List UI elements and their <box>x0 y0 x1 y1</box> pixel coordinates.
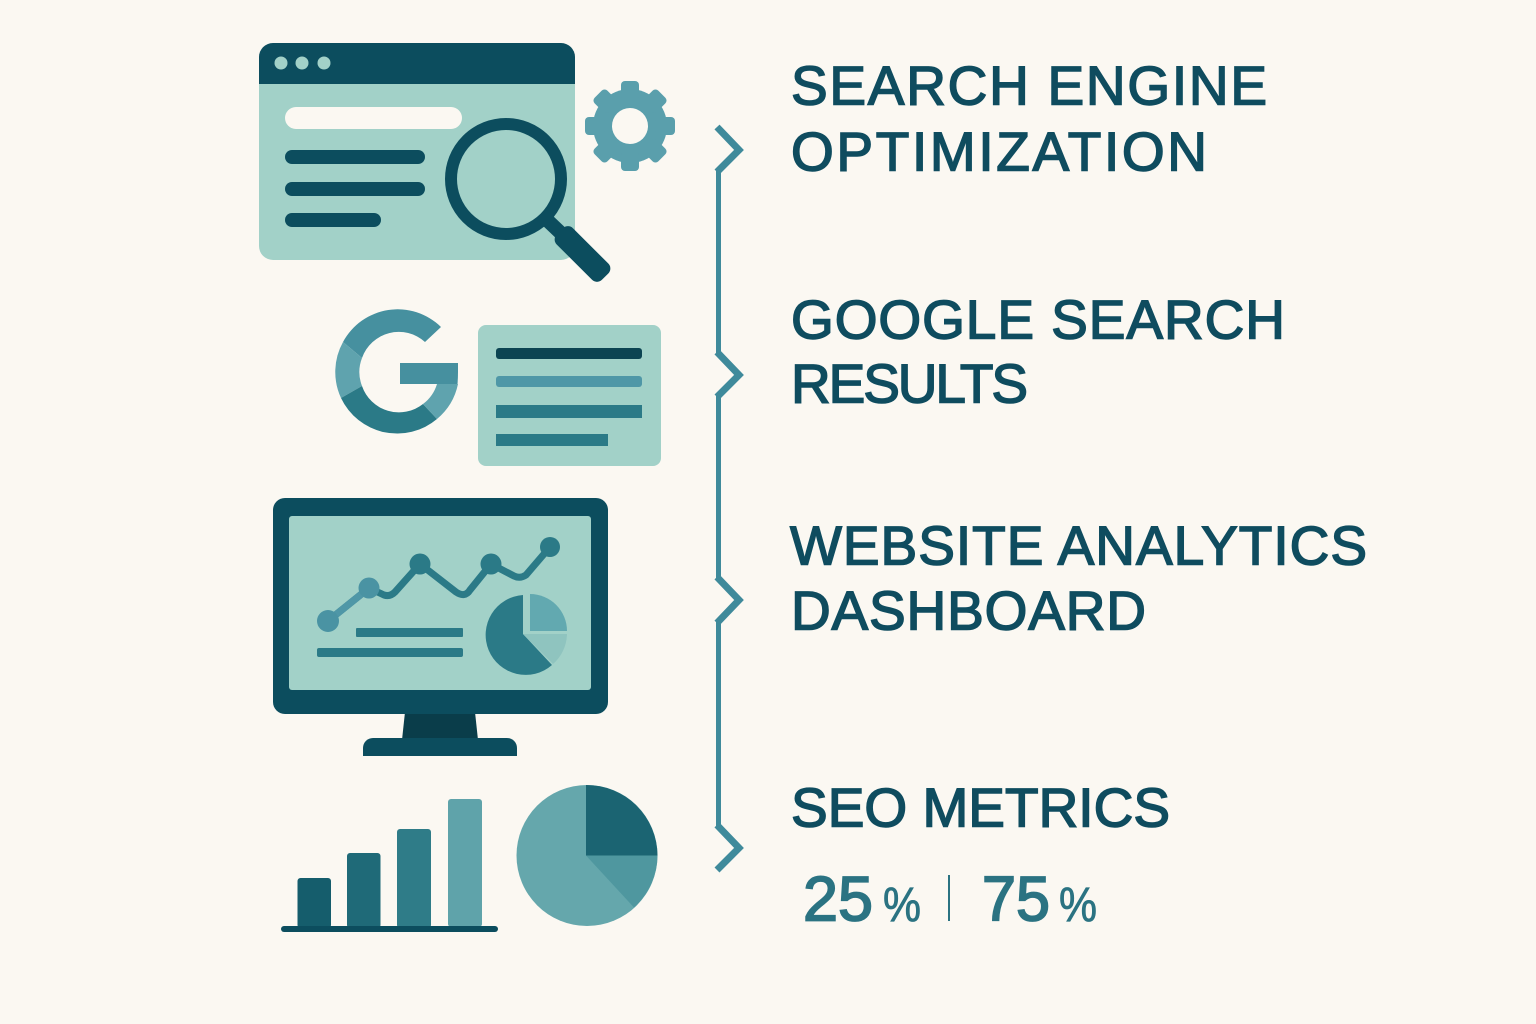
screen pie chart <box>486 594 567 675</box>
heading: search engine optimization <box>791 54 1267 182</box>
monitor screen <box>289 516 591 690</box>
heading: google search results: GOOGLE SEARCH <box>791 288 1285 350</box>
window control dots <box>274 56 330 70</box>
heading: website analytics dashboard: WEBSITE ANALYTICS <box>790 514 1367 576</box>
screen text bars <box>317 628 463 657</box>
search bar <box>285 107 462 129</box>
pie chart <box>516 785 658 926</box>
metrics values: % <box>1059 879 1097 932</box>
icon: Google G logo <box>335 309 458 434</box>
text lines <box>285 150 425 227</box>
icon: analytics monitor <box>273 498 608 756</box>
metrics values: 75 <box>982 864 1050 934</box>
line chart <box>317 537 560 632</box>
monitor frame <box>273 498 608 714</box>
monitor base <box>363 738 517 756</box>
heading: website analytics dashboard: DASHBOARD <box>791 580 1146 642</box>
browser window body <box>259 60 575 260</box>
panel: search results card <box>478 325 661 466</box>
magnifying glass <box>451 124 613 285</box>
timeline connector with arrows <box>717 127 739 870</box>
heading: google search results: RESULTS <box>791 352 1028 414</box>
bar chart <box>281 799 498 932</box>
result lines <box>496 348 642 359</box>
metrics values <box>803 864 1097 934</box>
heading: seo metrics: SEO METRICS <box>791 776 1170 838</box>
icon: browser window with magnifier <box>259 43 613 285</box>
heading: search engine optimization: SEARCH ENGINE <box>791 54 1267 116</box>
heading: google search results <box>791 288 1285 414</box>
browser title bar <box>259 43 575 84</box>
heading: search engine optimization: OPTIMIZATION <box>791 120 1207 182</box>
icon: gear <box>585 81 675 171</box>
metrics values: % <box>883 879 921 932</box>
metrics values: 25 <box>803 864 873 934</box>
heading: website analytics dashboard <box>790 514 1367 642</box>
monitor stand <box>402 712 478 740</box>
